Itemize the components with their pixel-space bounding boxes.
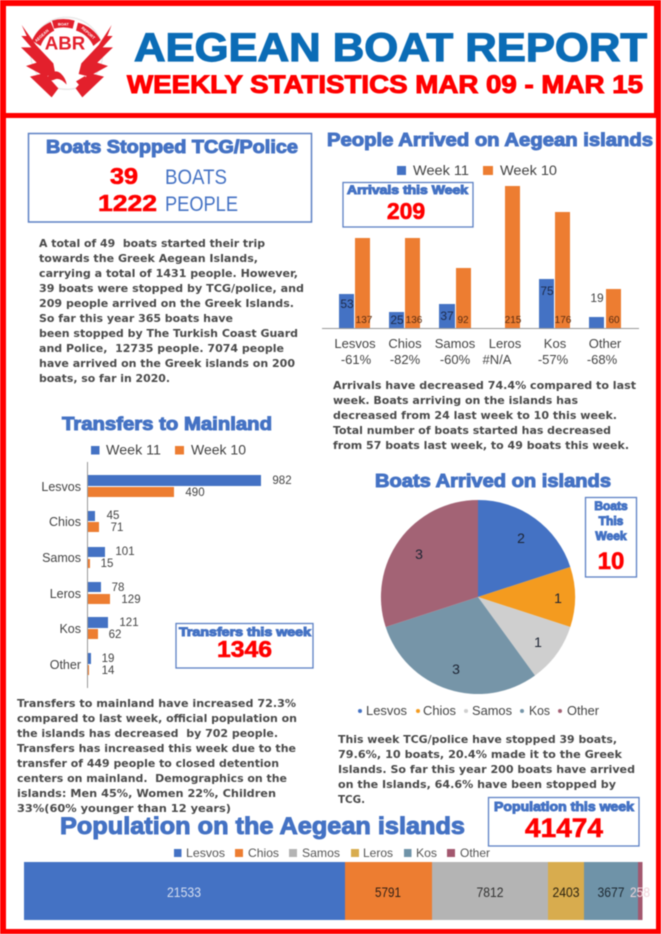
data labels: week 11: 53 [340, 297, 354, 311]
data labels: week 10: 60 [608, 315, 620, 326]
data labels: week 10: 92 [457, 315, 469, 326]
callout: boats this week: Boats [594, 499, 628, 513]
legend: population [174, 846, 490, 860]
axis labels: islands and change: -61% [341, 352, 372, 367]
stacked bar: population [24, 862, 650, 920]
data labels: week 10: 176 [555, 315, 572, 326]
heading: boats stopped: Boats Stopped TCG/Police [46, 137, 298, 157]
text block: weekly summary: A total of 49 boats started their trip [39, 237, 265, 250]
text block: weekly summary: been stopped by The Turkish Coast Guard [39, 327, 298, 340]
data labels: 71 [111, 522, 123, 534]
axis labels: islands and change: Leros [489, 336, 522, 351]
data labels: week 10: 136 [406, 315, 423, 326]
category labels: Chios [49, 515, 81, 529]
data labels: 121 [119, 617, 139, 629]
callout: population this week [488, 798, 639, 846]
text block: weekly summary: and Police, 12735 people. 7074 people [39, 342, 284, 355]
callout: arrivals this week: Arrivals this Week [347, 183, 468, 197]
axis labels: islands and change: Chios [388, 336, 422, 351]
stat: people: PEOPLE [165, 193, 238, 216]
text block: weekly summary: So far this year 365 boats have [39, 312, 233, 325]
data labels: 982 [272, 475, 292, 487]
category labels: Kos [59, 622, 81, 636]
callout: transfers this week: Transfers this week [179, 625, 311, 639]
subtitle: WEEKLY STATISTICS MAR 09 - MAR 15 [127, 71, 643, 99]
callout: boats this week: This [599, 514, 624, 528]
text block: boats comment [338, 733, 635, 806]
text block: transfers comment: Transfers has increased this week due to the [17, 742, 296, 755]
text block: boats comment: TCG. [338, 793, 365, 806]
bar values: 2403 [552, 884, 580, 900]
legend: arrivals [397, 162, 557, 178]
category labels: Other [50, 658, 81, 672]
data labels [101, 475, 292, 677]
legend: transfers: Week 11 [106, 442, 161, 458]
text block: arrivals comment: week. Boats arriving on the islands has [333, 394, 578, 407]
bar values: 3677 [598, 884, 625, 900]
legend: population: Samos [302, 846, 340, 860]
axis labels: islands and change: Samos [435, 336, 476, 351]
legend: pie chart: Lesvos [366, 703, 407, 718]
icon: ABR eagle logo: REPORT [80, 25, 97, 41]
text block: weekly summary: have arrived on the Greek islands on 200 [39, 357, 295, 370]
legend: pie chart: Kos [529, 703, 550, 718]
data labels: 129 [121, 594, 141, 606]
bar values: 5791 [375, 884, 401, 900]
callout: boats this week: 10 [598, 548, 624, 575]
axis labels: islands and change: #N/A [483, 352, 512, 367]
axis labels: islands and change: -82% [390, 352, 421, 367]
icon: ABR eagle logo [21, 17, 113, 97]
text block: weekly summary: boats, so far in 2020. [39, 372, 170, 385]
data labels: 19 [102, 653, 114, 665]
text block: arrivals comment: Total number of boats started has decreased [333, 424, 611, 437]
pie labels: 3 [415, 546, 423, 562]
pie labels: 1 [554, 590, 562, 606]
heading: people arrived: People Arrived on Aegean islands [327, 130, 653, 150]
text block: transfers comment [17, 697, 297, 815]
legend: population: Lesvos [186, 846, 225, 860]
bars: week 11 [87, 475, 261, 664]
text block: boats comment: 79.6%, 10 boats, 20.4% made it to the Greek [338, 748, 623, 761]
data labels: 14 [102, 665, 115, 677]
legend: pie chart: Chios [423, 703, 456, 718]
icon: ABR eagle logo: BOAT [58, 21, 69, 26]
bar values: 258 [630, 884, 650, 900]
axis labels: islands and change: -60% [440, 352, 471, 367]
data labels: 101 [115, 546, 135, 558]
text block: boats comment: on the Islands, 64.6% have been stopped by [338, 778, 616, 791]
callout: boats this week [586, 498, 636, 577]
legend: population: Leros [363, 846, 393, 860]
stat: boats: 39 [110, 163, 138, 189]
axis labels: islands and change [334, 336, 622, 367]
icon: ABR eagle logo: AEGEAN [34, 28, 50, 43]
text block: weekly summary: 209 people arrived on the Greek Islands. [39, 297, 294, 310]
text block: arrivals comment: from 57 boats last week, to 49 boats this week. [333, 439, 629, 452]
data labels: week 11: 19 [590, 291, 604, 305]
data labels: week 10: 215 [505, 315, 522, 326]
text block: transfers comment: transfer of 449 people to closed detention [17, 757, 279, 770]
category labels: Leros [50, 587, 81, 601]
text block: arrivals comment: decreased from 24 last week to 10 this week. [333, 409, 617, 422]
title: AEGEAN BOAT REPORT [134, 26, 647, 70]
data labels: week 11: 75 [540, 284, 554, 298]
data labels: week 11 [340, 284, 604, 327]
data labels: week 10 [356, 315, 620, 326]
callout: transfers this week: 1346 [217, 636, 272, 662]
data labels: week 10: 137 [356, 315, 373, 326]
stat: boats [110, 163, 227, 189]
header [21, 17, 647, 99]
callout: arrivals this week: 209 [387, 198, 425, 224]
text block: arrivals comment: Arrivals have decreased 74.4% compared to last [333, 379, 636, 392]
category labels: Samos [42, 551, 81, 565]
text block: weekly summary: carrying a total of 1431 people. However, [39, 267, 298, 280]
text block: boats comment: Islands. So far this year 200 boats have arrived [338, 763, 635, 776]
pie labels: 1 [534, 634, 542, 650]
pie labels: 3 [452, 661, 460, 677]
data labels: 78 [112, 582, 124, 594]
text block: transfers comment: Transfers to mainland have increased 72.3% [17, 697, 296, 710]
callout: boats this week: Week [595, 529, 627, 543]
data labels: week 11: 37 [440, 309, 454, 323]
legend: arrivals: Week 11 [413, 162, 469, 178]
data labels: 45 [107, 510, 119, 522]
axis labels: islands and change: Lesvos [334, 336, 376, 351]
text block: transfers comment: islands: Men 45%, Women 22%, Children [17, 787, 276, 800]
text block: transfers comment: 33%(60% younger than 12 years) [17, 802, 231, 815]
legend: transfers: Week 10 [191, 442, 246, 458]
icon: ABR eagle logo: ABR [45, 32, 86, 53]
stat: people [98, 190, 238, 216]
text block: transfers comment: compared to last week, official population on [17, 712, 297, 725]
bars: week 10 [87, 487, 174, 675]
pie chart: boats arrived [381, 500, 575, 694]
legend: arrivals: Week 10 [500, 162, 557, 178]
legend: population: Chios [248, 846, 279, 860]
data labels: week 11: 25 [390, 313, 404, 327]
text block: transfers comment: the islands has decreased by 702 people. [17, 727, 278, 740]
legend: population: Other [460, 846, 490, 860]
text block: boats comment: This week TCG/police have stopped 39 boats, [338, 733, 617, 746]
bar chart: arrivals [322, 162, 639, 367]
axis labels: islands and change: Other [589, 336, 622, 351]
bar chart: transfers [41, 442, 292, 688]
legend: transfers [91, 442, 246, 458]
bars: week 11 [339, 279, 604, 328]
bar values [167, 884, 650, 900]
text block: weekly summary: 39 boats were stopped by TCG/police, and [39, 282, 304, 295]
bar values: 7812 [476, 884, 504, 900]
heading: population: Population on the Aegean islands [60, 813, 465, 840]
data labels: 62 [109, 629, 121, 641]
stat: boats: BOATS [165, 166, 227, 189]
bars: week 10 [355, 186, 621, 328]
heading: transfers: Transfers to Mainland [62, 414, 272, 434]
text block: weekly summary [39, 237, 304, 385]
pie labels: 2 [517, 530, 525, 546]
legend: pie chart: Other [567, 703, 600, 718]
legend: pie chart: Samos [472, 703, 512, 718]
legend: population: Kos [416, 846, 437, 860]
text block: transfers comment: centers on mainland. Demographics on the [17, 772, 287, 785]
callout: transfers this week [176, 624, 313, 668]
axis labels: islands and change: -57% [538, 352, 569, 367]
heading: boats arrived: Boats Arrived on islands [375, 471, 611, 491]
data labels: 490 [185, 487, 205, 499]
text block: weekly summary: towards the Greek Aegean Islands, [39, 252, 258, 265]
category labels [41, 480, 81, 672]
callout: population this week: 41474 [525, 813, 603, 843]
pie labels [415, 530, 562, 677]
callout: population this week: Population this week [494, 799, 635, 814]
data labels: 15 [101, 558, 113, 570]
legend: pie chart [358, 703, 600, 718]
text block: arrivals comment [333, 379, 636, 452]
bar values: 21533 [167, 884, 201, 900]
axis labels: islands and change: -68% [587, 352, 618, 367]
callout: arrivals this week [343, 182, 473, 227]
panel: boats stopped [28, 134, 312, 222]
category labels: Lesvos [41, 480, 81, 494]
stat: people: 1222 [98, 190, 157, 216]
axis labels: islands and change: Kos [544, 336, 567, 351]
